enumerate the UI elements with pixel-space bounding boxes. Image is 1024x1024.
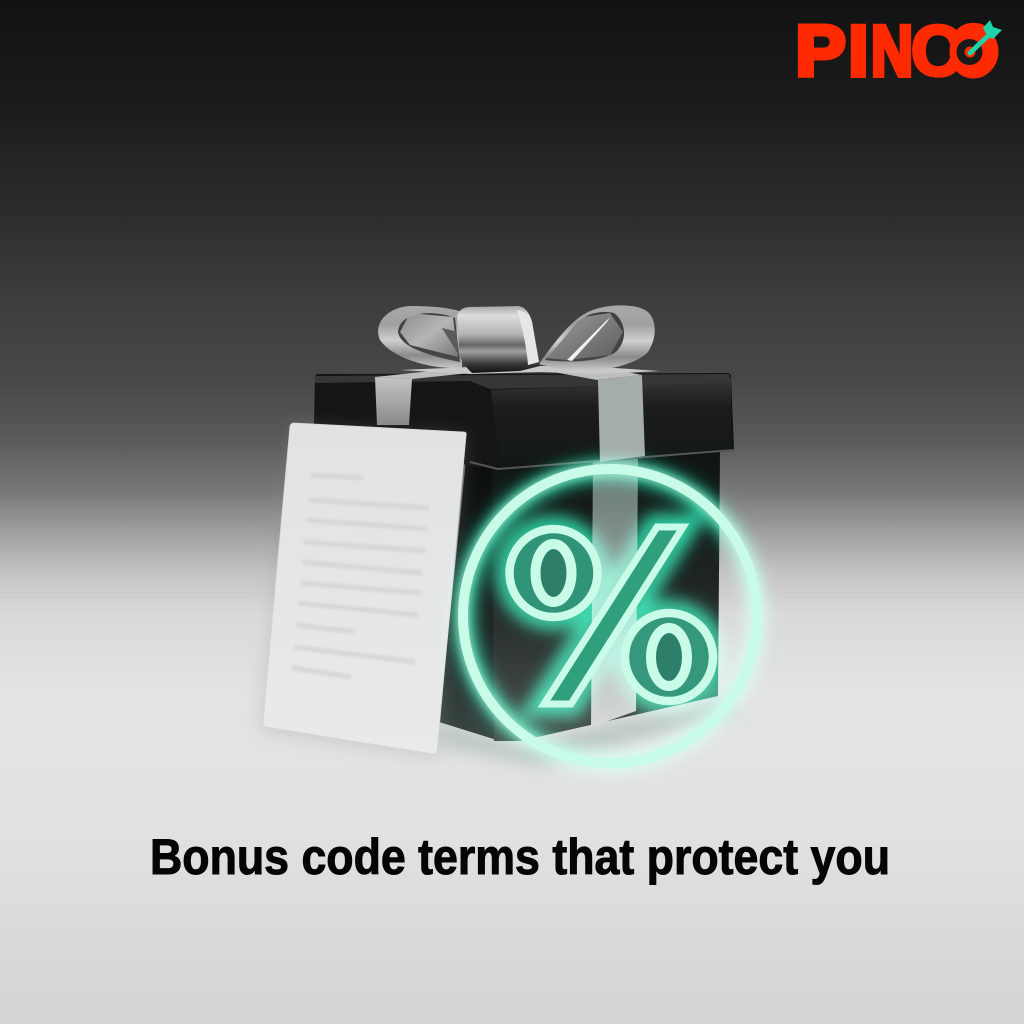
ribbon bow — [378, 305, 660, 374]
gift box — [316, 305, 740, 765]
document sheet — [260, 423, 466, 757]
neon strokes — [463, 469, 757, 763]
logo: PINCO: N — [871, 11, 913, 91]
caption: Bonus code terms that protect you — [150, 829, 890, 885]
logo: PINCO: C — [911, 12, 962, 92]
logo: PINCO — [796, 11, 1002, 92]
document text lines — [292, 475, 429, 677]
left loop — [400, 313, 458, 357]
box lid — [316, 367, 733, 469]
logo: PINCO: I — [848, 12, 868, 92]
lid ribbons — [375, 377, 412, 425]
wide glow — [464, 470, 756, 762]
neon percent badge — [463, 469, 757, 763]
box body — [439, 450, 720, 741]
right loop — [545, 313, 623, 360]
knot — [457, 306, 540, 373]
glyph fills — [510, 527, 713, 704]
logo: PINCO: O — [950, 11, 997, 91]
icon: target and arrow — [950, 20, 1002, 78]
pale halo — [463, 469, 757, 763]
logo: PINCO: P — [796, 11, 846, 91]
shadow under box — [440, 700, 740, 765]
